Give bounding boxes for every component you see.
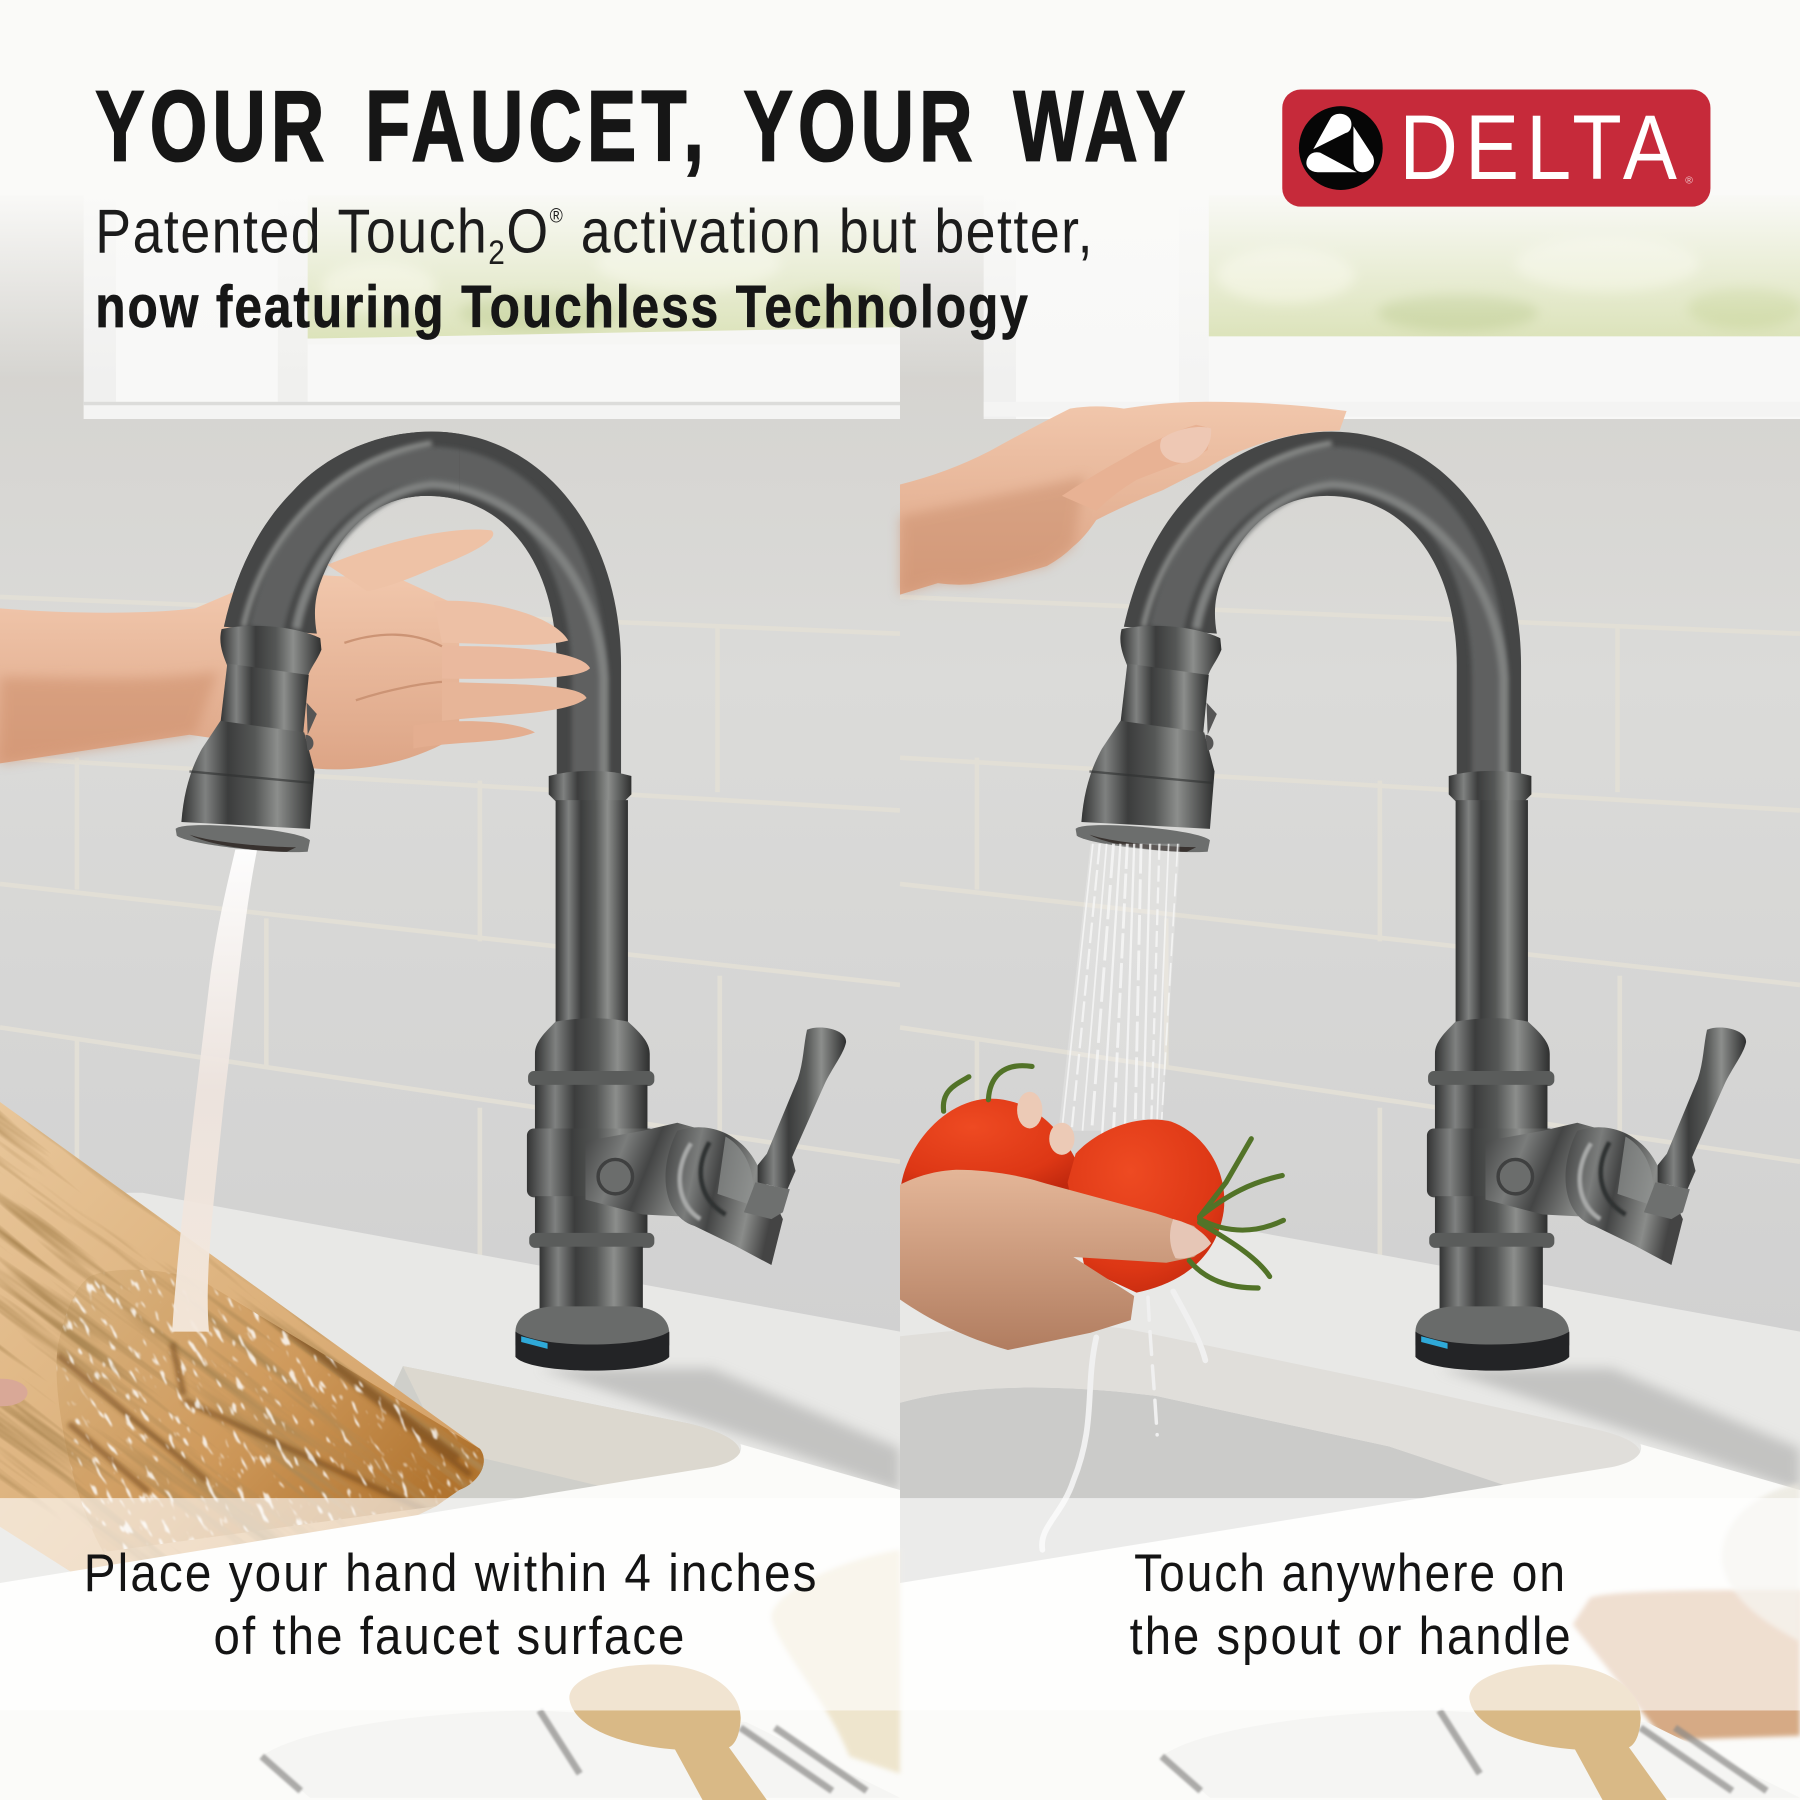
- registered mark: ®: [1685, 176, 1693, 187]
- caption: right: the spout or handle: [1130, 1607, 1573, 1666]
- tomato left: [901, 1099, 1079, 1194]
- wall right: [900, 195, 1800, 1401]
- faucet left: spout and column: [224, 432, 846, 1371]
- sink basin: [0, 1366, 740, 1607]
- logo: Delta: [1282, 90, 1710, 207]
- faucet left: head and near spout: [176, 432, 460, 852]
- subtitle: O: [506, 198, 550, 267]
- forearm: [0, 591, 270, 763]
- foreground objects left: [262, 1550, 900, 1800]
- subtitle: ®: [550, 205, 564, 228]
- counter: [0, 1193, 900, 1607]
- towel stripes left: [262, 1710, 867, 1791]
- thumb nail: [1160, 427, 1211, 463]
- top hand: [900, 402, 1347, 595]
- logo wordmark: DELTA: [1399, 97, 1684, 199]
- towel left: [262, 1710, 900, 1798]
- caption: left: Place your hand within 4 inches: [84, 1544, 818, 1603]
- sink wall right: [900, 1325, 1641, 1489]
- wet grain and specks: [56, 1270, 484, 1551]
- title: YOUR FAUCET, YOUR WAY: [95, 72, 1190, 183]
- spoon left: [569, 1665, 767, 1800]
- faucet right: [1076, 432, 1746, 1371]
- small nail at board edge: [0, 1379, 28, 1406]
- cutting board: [0, 1102, 484, 1572]
- top white fade: [0, 0, 1800, 379]
- faucet shadow: [540, 1368, 900, 1492]
- counter right: [900, 1193, 1800, 1607]
- foreground objects right: [1162, 1483, 1800, 1800]
- wood grain: [0, 1111, 483, 1560]
- panel: left touchless scene: [0, 209, 900, 1583]
- water spray: [1058, 844, 1180, 1136]
- wall: [0, 195, 900, 1401]
- thumb nail lower: [1170, 1219, 1211, 1259]
- thumb: [1062, 425, 1211, 511]
- finger 4: [442, 682, 587, 721]
- tomato stems: [943, 1066, 1283, 1288]
- finger 3: [442, 646, 590, 679]
- towel stripes right: [1162, 1710, 1767, 1791]
- front counter right: [900, 1444, 1800, 1800]
- glass bowl left: [771, 1550, 900, 1774]
- caption: left: of the faucet surface: [214, 1607, 686, 1666]
- glass bowl right: [1722, 1483, 1800, 1642]
- logo background: [1282, 90, 1710, 207]
- finger 5: [413, 721, 535, 748]
- logo mark: [1299, 106, 1383, 190]
- sink wall: [403, 1366, 740, 1489]
- front counter: [0, 1444, 900, 1800]
- towel right: [1162, 1710, 1800, 1798]
- lower hand: [900, 1170, 1211, 1350]
- spoon right: [1469, 1665, 1667, 1800]
- palm: [301, 574, 459, 769]
- finger 2: [434, 601, 568, 645]
- caption: right: [1130, 1544, 1573, 1666]
- fingertips behind tomato: [1017, 1092, 1074, 1155]
- caption: left: [84, 1544, 818, 1666]
- window frame right: [984, 225, 1800, 419]
- subtitle bold line: now featuring Touchless Technology: [95, 273, 1030, 340]
- caption: right: Touch anywhere on: [1134, 1544, 1567, 1603]
- subtitle: 2: [488, 234, 506, 272]
- caption band overlay: [0, 1498, 1800, 1710]
- wet area: [57, 1270, 484, 1552]
- finger 1: [327, 529, 493, 591]
- subtitle: activation but better,: [564, 198, 1094, 267]
- water drips: [1042, 1291, 1205, 1550]
- board right: [1573, 1590, 1800, 1740]
- sink basin right: [900, 1388, 1515, 1607]
- water stream: [172, 849, 257, 1332]
- panel: right touch scene: [894, 209, 1800, 1583]
- subtitle: Patented Touch: [95, 198, 549, 267]
- window frame left: [84, 225, 900, 419]
- tomato right: [1068, 1120, 1224, 1293]
- faucet shadow right: [1440, 1368, 1800, 1492]
- forearm and hand: [0, 529, 590, 769]
